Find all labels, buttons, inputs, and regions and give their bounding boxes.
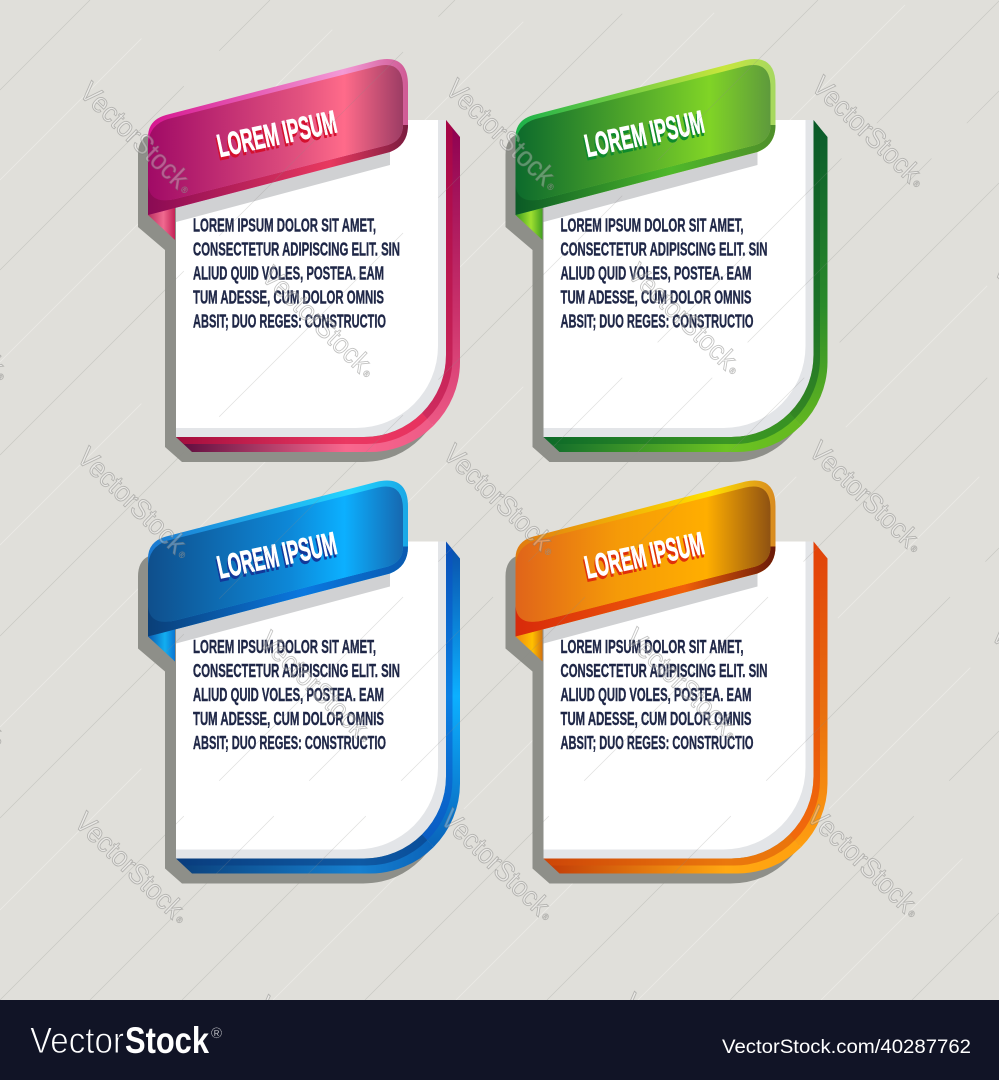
card sheet [544, 542, 814, 858]
card sheet [176, 120, 446, 437]
watermarks: VectorStock [440, 73, 561, 191]
body text: LOREM IPSUM DOLOR SIT AMET, [560, 636, 744, 657]
card shadow [138, 120, 432, 462]
body text [560, 636, 768, 753]
card: blue [138, 481, 460, 884]
ribbon title: LOREM IPSUM [213, 528, 339, 589]
body text: LOREM IPSUM DOLOR SIT AMET, [560, 214, 744, 236]
footer bar [0, 1000, 999, 1080]
card: orange [506, 481, 828, 884]
watermarks: ® [724, 730, 736, 742]
ribbon [516, 481, 776, 636]
body text: CONSECTETUR ADIPISCING ELIT. SIN [560, 660, 768, 681]
body text: TUM ADESSE, CUM DOLOR OMNIS [560, 286, 752, 308]
watermarks: VectorStock [806, 70, 927, 188]
footer logo: Vector [30, 1020, 124, 1061]
body text: TUM ADESSE, CUM DOLOR OMNIS [560, 708, 752, 729]
ribbon title: LOREM IPSUM [581, 528, 706, 589]
ribbon cast shadow [544, 572, 758, 644]
watermarks: VectorStock [69, 806, 190, 924]
card shadow [506, 542, 800, 884]
coloured side edge [176, 120, 460, 452]
body text: ALIUD QUID VOLES, POSTEA. EAM [560, 262, 752, 284]
body text: ALIUD QUID VOLES, POSTEA. EAM [193, 262, 384, 284]
watermarks: ® [542, 546, 554, 558]
watermarks: VectorStock [622, 257, 743, 375]
coloured side edge [176, 542, 460, 874]
ribbon title [213, 525, 340, 589]
body text: ABSIT; DUO REGES: CONSTRUCTIO [193, 732, 386, 753]
watermarks: VectorStock [619, 622, 740, 740]
coloured side edge [544, 120, 828, 452]
ribbon title: LOREM IPSUM [213, 107, 339, 167]
body text: ALIUD QUID VOLES, POSTEA. EAM [193, 684, 384, 705]
watermarks: ® [545, 181, 557, 193]
ribbon [148, 481, 408, 636]
watermarks: VectorStock [437, 438, 558, 556]
body text: ABSIT; DUO REGES: CONSTRUCTIO [560, 310, 754, 332]
body text: CONSECTETUR ADIPISCING ELIT. SIN [193, 238, 400, 260]
watermarks: VectorStock [71, 441, 192, 559]
body text: LOREM IPSUM DOLOR SIT AMET, [193, 214, 376, 236]
ribbon cast shadow [176, 150, 390, 222]
body text: TUM ADESSE, CUM DOLOR OMNIS [193, 286, 384, 308]
watermarks: VectorStock [803, 435, 924, 553]
body text [560, 214, 768, 332]
body text: CONSECTETUR ADIPISCING ELIT. SIN [560, 238, 768, 260]
watermarks: ® [906, 908, 918, 920]
body text: LOREM IPSUM DOLOR SIT AMET, [193, 636, 376, 657]
ribbon cast shadow [176, 572, 390, 644]
footer logo: Stock [125, 1020, 209, 1061]
ribbon fold [148, 208, 175, 240]
watermarks: ® [540, 911, 552, 923]
body text: CONSECTETUR ADIPISCING ELIT. SIN [193, 660, 400, 681]
ribbon title: LOREM IPSUM [581, 103, 707, 164]
ribbon title [580, 103, 708, 167]
ribbon fold [516, 208, 542, 240]
watermarks: VectorStock [801, 800, 922, 918]
watermarks: ® [361, 368, 373, 380]
card: pink [138, 59, 460, 462]
body text: ALIUD QUID VOLES, POSTEA. EAM [560, 684, 752, 705]
watermarks: ® [727, 365, 739, 377]
watermarks: ® [908, 543, 920, 555]
watermarks: ® [179, 184, 191, 196]
footer logo [30, 1020, 222, 1061]
watermarks: ® [358, 733, 370, 745]
card sheet [176, 542, 446, 858]
ribbon title: LOREM IPSUM [214, 103, 340, 164]
ribbon title [580, 525, 708, 589]
watermarks: ® [174, 914, 186, 926]
ribbon [516, 59, 776, 215]
ribbon title: LOREM IPSUM [214, 525, 340, 585]
body text: ABSIT; DUO REGES: CONSTRUCTIO [560, 732, 754, 753]
ribbon fold [148, 629, 175, 662]
card shadow [138, 542, 432, 884]
watermarks: ® [176, 549, 188, 561]
footer logo: ® [211, 1025, 222, 1042]
body text [193, 214, 400, 332]
ribbon cast shadow [544, 150, 758, 222]
card shadow [506, 120, 800, 462]
body text: TUM ADESSE, CUM DOLOR OMNIS [193, 708, 384, 729]
coloured side edge [544, 542, 828, 874]
ribbon title [213, 103, 340, 167]
body text: ABSIT; DUO REGES: CONSTRUCTIO [193, 310, 386, 332]
ribbon title: LOREM IPSUM [581, 525, 707, 585]
watermarks: VectorStock [435, 803, 556, 921]
ribbon title: LOREM IPSUM [581, 107, 706, 167]
watermarks: ® [911, 178, 923, 190]
ribbon [148, 59, 408, 215]
body text [193, 636, 400, 753]
watermarks: VectorStock [256, 260, 377, 378]
ribbon fold [516, 629, 542, 662]
card sheet [544, 120, 814, 437]
footer url: VectorStock.com/40287762 [722, 1037, 971, 1058]
watermarks: VectorStock [253, 625, 374, 743]
card: green [506, 59, 828, 462]
watermarks: VectorStock [74, 76, 195, 194]
